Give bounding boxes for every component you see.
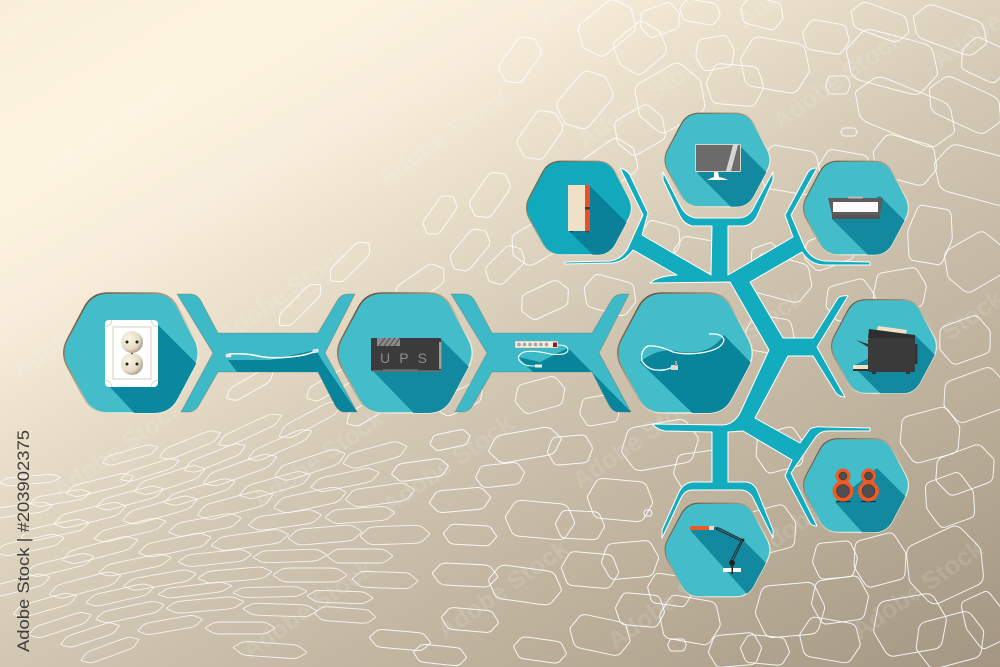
background pattern: lower right cells bbox=[369, 417, 1000, 667]
faint stock watermarks: Adobe Stock bbox=[667, 284, 809, 395]
faint stock watermarks: Adobe Stock bbox=[237, 554, 379, 665]
icon: double wall socket bbox=[105, 320, 158, 387]
vertical stock id caption: Adobe Stock | #203902375 bbox=[14, 430, 33, 652]
panel: speakers hexagon bbox=[803, 438, 909, 533]
faint stock watermarks: Adobe Stock bbox=[432, 534, 574, 645]
faint stock watermarks: Adobe Stock bbox=[567, 384, 709, 495]
faint stock watermarks: Adobe Stock bbox=[7, 274, 149, 385]
faint stock watermarks: Adobe Stock bbox=[42, 72, 184, 183]
faint stock watermarks: Adobe Stock bbox=[47, 394, 189, 505]
faint stock watermarks: Adobe Stock bbox=[372, 82, 514, 193]
panel: UPS hexagon bbox=[337, 292, 473, 414]
icon: pair of speakers bbox=[832, 468, 879, 502]
icon: plug cable bbox=[226, 349, 318, 358]
faint stock watermarks: Adobe Stock bbox=[247, 404, 389, 515]
icon: flatbed scanner bbox=[828, 196, 883, 219]
faint stock watermarks: Adobe Stock bbox=[167, 116, 309, 227]
connector: socket to UPS with plug cable bbox=[177, 294, 357, 412]
faint stock watermarks: Adobe Stock bbox=[602, 544, 744, 655]
icon: refrigerator bbox=[568, 185, 590, 232]
faint stock watermarks: Adobe Stock bbox=[572, 44, 714, 155]
background pattern: large hexagonal cells, upper right bbox=[224, 0, 1000, 466]
panel: scanner hexagon bbox=[803, 160, 909, 256]
icon: power cord and plug bbox=[642, 334, 724, 370]
faint stock watermarks: Adobe Stock bbox=[767, 24, 909, 135]
faint stock watermarks: Adobe Stock bbox=[847, 534, 989, 645]
icon: UPS unit: UPS bbox=[380, 350, 427, 366]
icon: UPS unit bbox=[371, 338, 442, 371]
connector: UPS to power cord with power strip bbox=[451, 294, 631, 412]
icon: printer bbox=[853, 326, 918, 373]
faint stock watermarks: Adobe Stock bbox=[747, 454, 889, 565]
icon: power strip bbox=[515, 341, 568, 368]
icon: desk lamp bbox=[690, 526, 744, 574]
icon: computer monitor bbox=[696, 144, 740, 180]
background pattern: flattened cells, lower left bbox=[0, 398, 430, 666]
panel: refrigerator hexagon bbox=[526, 160, 632, 256]
panel: printer hexagon bbox=[831, 299, 937, 394]
panel: desk lamp hexagon bbox=[664, 502, 770, 598]
panel: wall socket hexagon bbox=[63, 292, 199, 414]
branching connector tree with device brackets bbox=[565, 168, 870, 538]
panel: monitor hexagon bbox=[664, 112, 770, 208]
panel: power cord hexagon bbox=[617, 292, 753, 414]
faint stock watermarks: Adobe Stock bbox=[212, 239, 354, 350]
faint stock watermarks: Adobe Stock bbox=[377, 409, 519, 520]
